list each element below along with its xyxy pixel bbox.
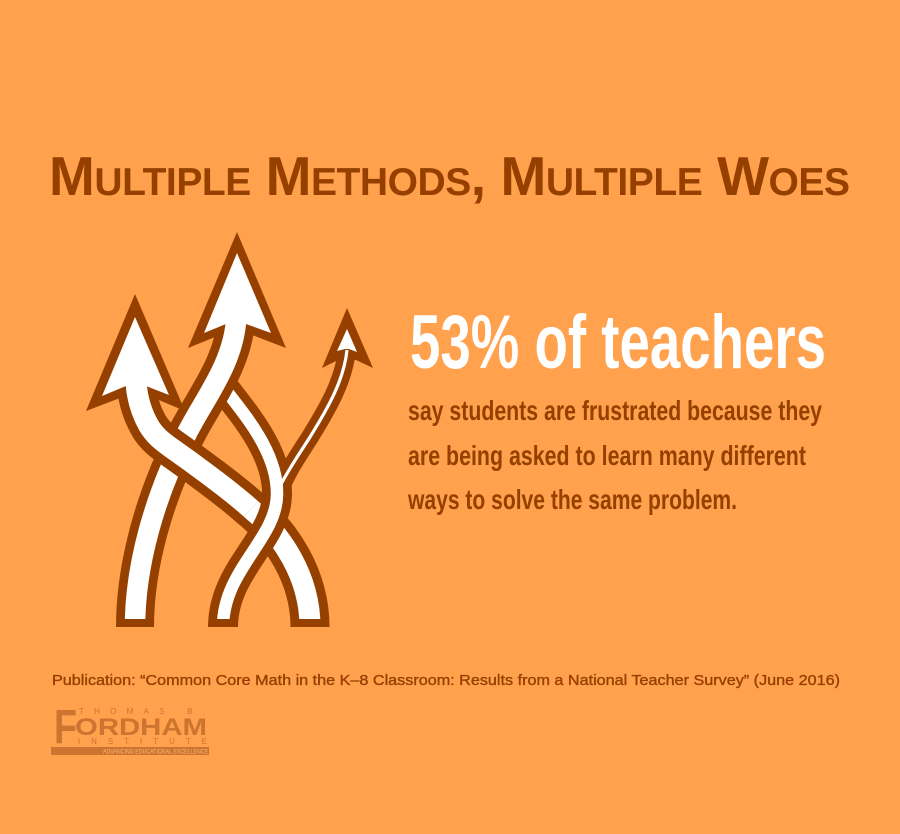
logo: Thomas B. Fordham Institute: THOMAS B. — [79, 707, 205, 716]
publication source: Publication: “Common Core Math in the K–8 Classroom: Results from a National Teacher Survey” (June 2016) — [52, 673, 840, 689]
arrow: left arrow band crossing over centre arrow — [136, 382, 251, 509]
arrow bases — [117, 619, 328, 627]
logo: Thomas B. Fordham Institute: F — [54, 701, 77, 754]
arrow: thin right arrow with forked S-curve shaft — [222, 308, 373, 627]
arrow: left large arrow — [86, 294, 310, 627]
arrow: centre tall arrow — [135, 232, 286, 627]
logo: Thomas B. Fordham Institute: INSTITUTE — [78, 737, 207, 746]
title: Multiple Methods, Multiple Woes — [49, 145, 850, 207]
logo: Thomas B. Fordham Institute: ORDHAM — [75, 714, 207, 741]
statistic description — [407, 395, 822, 515]
logo: Thomas B. Fordham Institute: ADVANCING EDUCATIONAL EXCELLENCE — [103, 750, 208, 756]
logo: Thomas B. Fordham Institute — [51, 701, 209, 756]
statistic description: ways to solve the same problem. — [407, 484, 737, 515]
icon: three intertwined arrows — [86, 232, 373, 627]
